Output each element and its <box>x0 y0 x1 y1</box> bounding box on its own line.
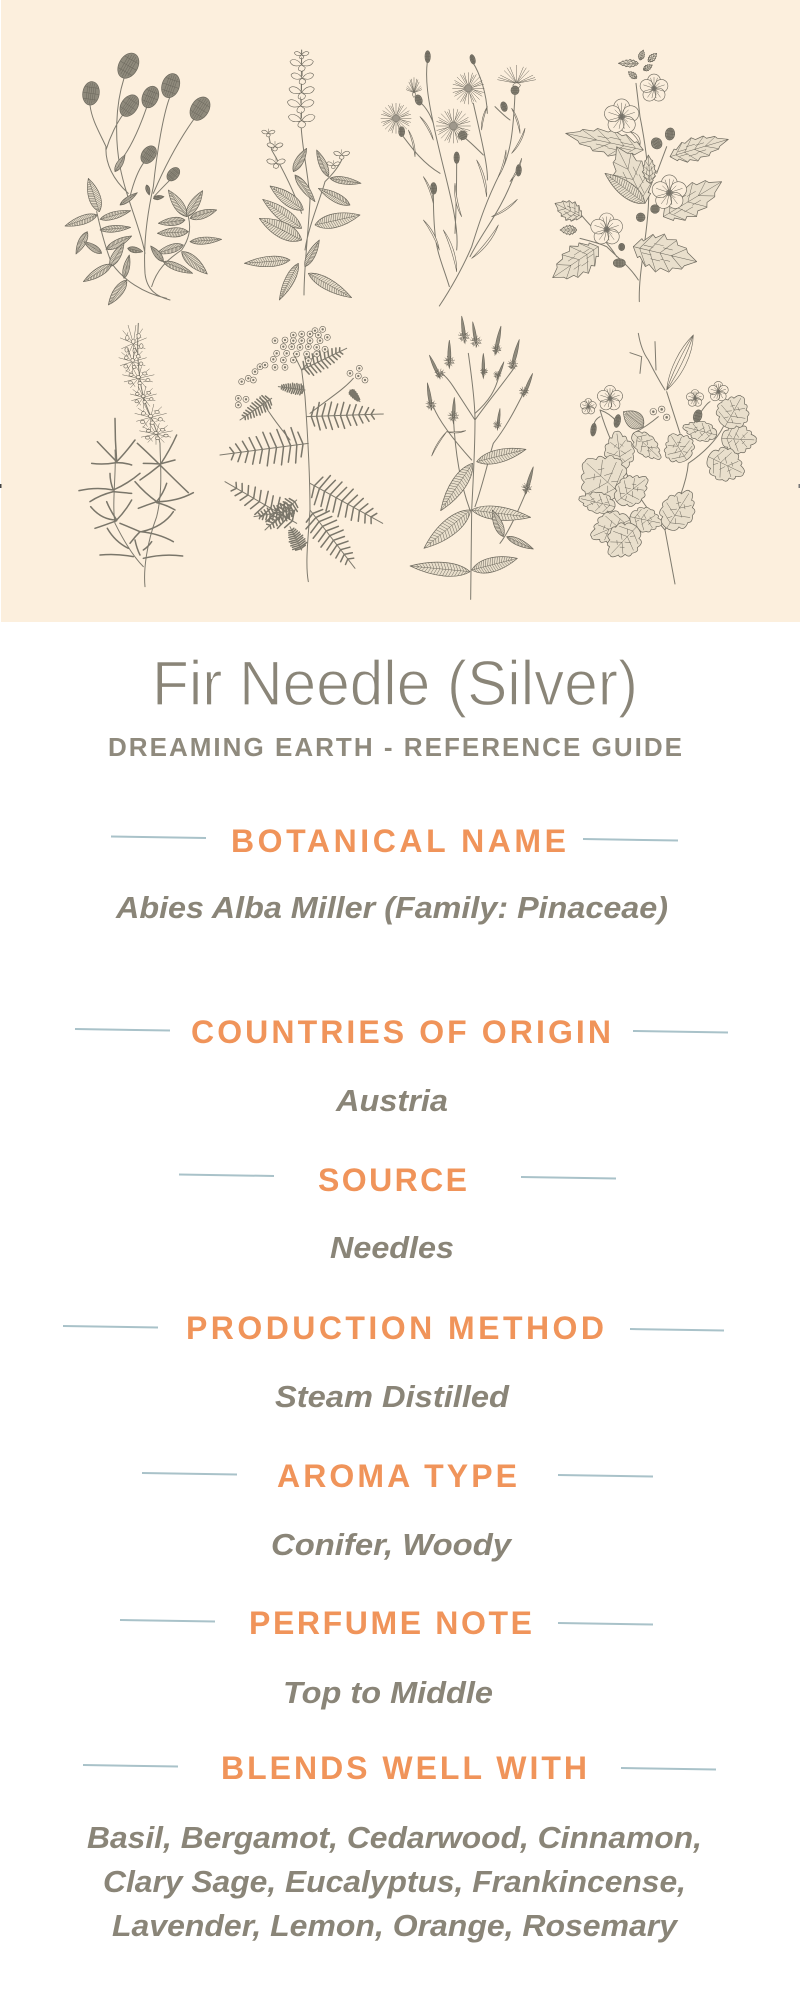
value: botanical name: Abies Alba Miller (Family: Pinaceae) <box>115 890 668 925</box>
heading: countries of origin: COUNTRIES OF ORIGIN <box>191 1014 611 1050</box>
value: source: Needles <box>330 1230 454 1265</box>
illustration: hyssop plant <box>79 323 193 587</box>
section: countries of origin <box>75 1014 728 1118</box>
value: countries of origin: Austria <box>335 1083 448 1118</box>
value: blends list: Clary Sage, Eucalyptus, Frankincense, <box>103 1864 686 1899</box>
value: blends list: Lavender, Lemon, Orange, Rosemary <box>112 1908 679 1943</box>
heading: botanical name: BOTANICAL NAME <box>231 823 566 859</box>
section: aroma type <box>142 1458 653 1562</box>
illustration: vervain plant <box>409 316 535 599</box>
illustration: burnet plant <box>64 49 222 308</box>
section: blends well with <box>83 1750 716 1943</box>
value: perfume note: Top to Middle <box>283 1675 493 1710</box>
value: blends list <box>87 1820 702 1943</box>
subtitle: DREAMING EARTH - REFERENCE GUIDE <box>108 732 682 762</box>
header panel with botanical illustrations <box>0 0 800 622</box>
section: perfume note <box>120 1605 653 1710</box>
value: aroma type: Conifer, Woody <box>271 1527 513 1562</box>
title: Fir Needle (Silver) <box>152 649 638 719</box>
heading: blends well with: BLENDS WELL WITH <box>221 1750 587 1786</box>
heading: perfume note: PERFUME NOTE <box>249 1605 532 1641</box>
illustration: cornflower plant <box>381 51 536 306</box>
illustration: celandine plant <box>568 333 757 584</box>
illustration: sage plant <box>244 50 362 303</box>
heading: production method: PRODUCTION METHOD <box>186 1310 604 1346</box>
heading: aroma type: AROMA TYPE <box>277 1458 517 1494</box>
section: production method <box>63 1310 724 1414</box>
illustration: tansy plant <box>218 326 391 582</box>
value: blends list: Basil, Bergamot, Cedarwood, Cinnamon, <box>87 1820 702 1855</box>
illustration: mallow plant <box>543 49 732 302</box>
heading: source: SOURCE <box>318 1162 467 1198</box>
value: production method: Steam Distilled <box>275 1379 510 1414</box>
section: botanical name <box>111 823 678 925</box>
section: source <box>179 1162 616 1265</box>
